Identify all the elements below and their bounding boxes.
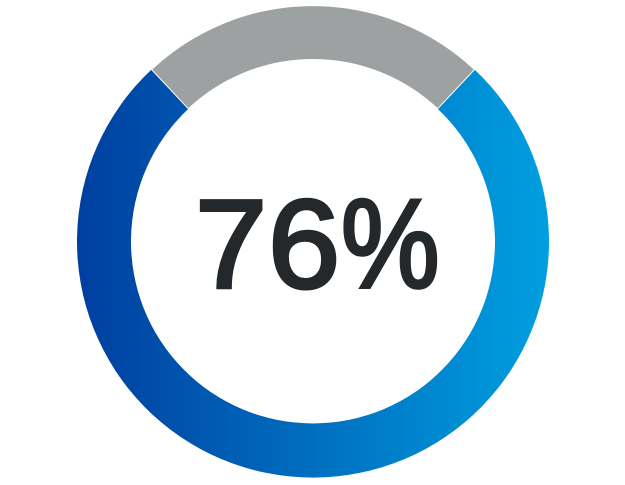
- gray segment: remaining 24 percent: [152, 6, 474, 109]
- center value: %: [341, 175, 440, 315]
- center value: [195, 174, 440, 315]
- center value: 7: [195, 174, 267, 315]
- center value: 6: [268, 174, 340, 315]
- blue segment: 76 percent: [77, 70, 549, 478]
